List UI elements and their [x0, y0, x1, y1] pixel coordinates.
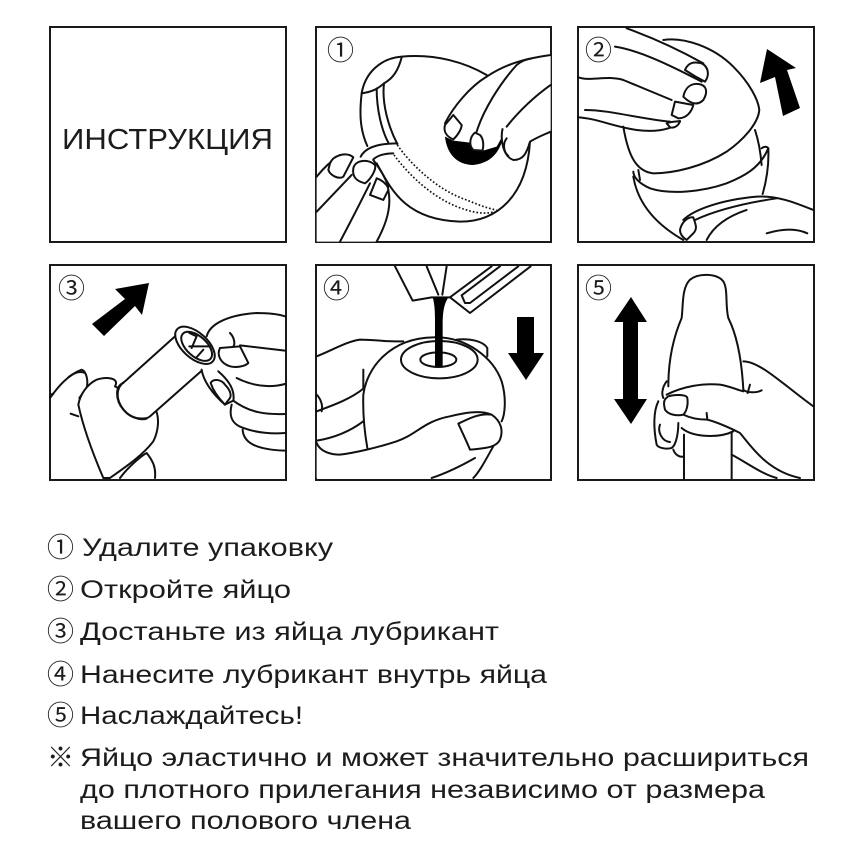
step 4 text: ④: [47, 660, 74, 690]
step 1 text: [47, 533, 334, 563]
panel: title: [50, 27, 286, 242]
number 3: ③: [58, 274, 85, 304]
panel: step 3: [50, 265, 286, 480]
step 5 text: ⑤: [47, 701, 74, 731]
note: вашего полового члена: [80, 807, 411, 835]
step 3 illustration: [50, 313, 285, 478]
step 2 illustration: [578, 28, 813, 240]
step 5 text: [47, 701, 303, 731]
step 4 illustration: [317, 266, 531, 478]
note: [47, 743, 809, 835]
arrow: up and down: [614, 297, 647, 424]
step 4 text: Нанесите лубрикант внутрь яйца: [80, 661, 547, 689]
step 2 text: [47, 575, 291, 605]
step 2 text: Откройте яйцо: [80, 576, 291, 604]
step 5 illustration: [654, 275, 813, 479]
arrow: diagonal: [92, 283, 149, 336]
panel: step 1: [316, 27, 551, 242]
number 2: ②: [585, 36, 612, 66]
panel: step 4: [316, 265, 551, 480]
note: до плотного прилегания независимо от размера: [80, 776, 765, 804]
number 5: ⑤: [585, 274, 612, 304]
number 4: ④: [323, 274, 350, 304]
panel: step 2: [578, 27, 814, 242]
step 1 text: ①: [47, 533, 74, 563]
heading: instruction: ИНСТРУКЦИЯ: [62, 124, 273, 156]
step 1 text: Удалите упаковку: [82, 534, 334, 562]
note: ※: [47, 743, 74, 773]
instruction list: [47, 533, 809, 835]
note: Яйцо эластично и может значительно расшириться: [80, 744, 809, 772]
step 3 text: Достаньте из яйца лубрикант: [80, 618, 500, 646]
number 1: ①: [327, 36, 354, 66]
panel: step 5: [578, 265, 814, 480]
step 2 text: ②: [47, 575, 74, 605]
arrow: down: [508, 317, 544, 380]
arrow: up: [760, 49, 800, 116]
step 1 illustration: [317, 55, 551, 242]
step 5 text: Наслаждайтесь!: [80, 702, 303, 730]
step 3 text: ③: [47, 617, 74, 647]
